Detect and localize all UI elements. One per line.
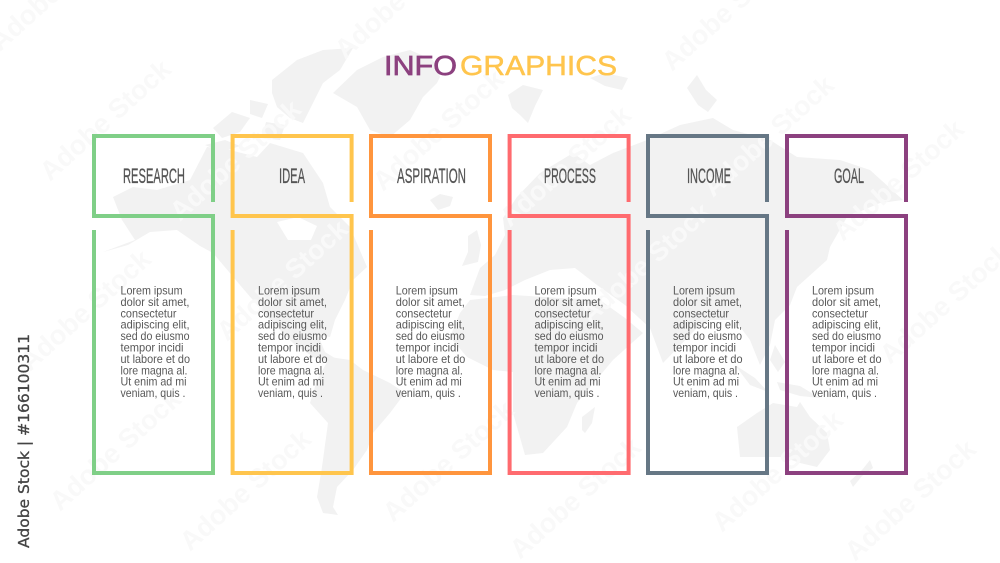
panel: income xyxy=(648,136,767,473)
panel: income: consectetur xyxy=(673,306,729,320)
panel: process: veniam, quis . xyxy=(534,386,600,400)
panel: process xyxy=(510,136,629,473)
panel: process: Ut enim ad mi xyxy=(534,375,600,389)
panel: income: ut labore et do xyxy=(673,352,743,366)
watermarks: Adobe Stock xyxy=(494,99,637,232)
watermarks: Adobe Stock xyxy=(574,196,717,329)
panel: income: Ut enim ad mi xyxy=(673,375,739,389)
panel: aspiration xyxy=(371,136,490,473)
panel: goal: veniam, quis . xyxy=(812,386,877,400)
panel: goal: consectetur xyxy=(812,306,868,320)
panel: idea: lore magna al. xyxy=(258,363,325,377)
panel: aspiration: sed do eiusmo xyxy=(396,329,465,343)
panel: research: ut labore et do xyxy=(120,352,190,366)
watermarks: Adobe Stock xyxy=(367,63,510,196)
panel: process: sed do eiusmo xyxy=(534,329,604,343)
panel: research: consectetur xyxy=(120,306,176,320)
panel: income: lore magna al. xyxy=(673,363,740,377)
panel: process: dolor sit amet, xyxy=(534,295,604,309)
watermarks: Adobe Stock xyxy=(504,431,647,563)
panel: idea xyxy=(233,136,352,473)
panel: goal: adipiscing elit, xyxy=(812,318,881,332)
watermarks: Adobe Stock xyxy=(706,404,849,537)
panel: idea: ut labore et do xyxy=(258,352,328,366)
watermarks: Adobe Stock xyxy=(697,69,840,202)
panel: aspiration: veniam, quis . xyxy=(396,386,461,400)
watermarks: Adobe Stock xyxy=(839,433,982,563)
panel: aspiration: adipiscing elit, xyxy=(396,318,465,332)
panel: goal: Lorem ipsum xyxy=(812,284,874,298)
panel: idea: sed do eiusmo xyxy=(258,329,327,343)
panel: research: Lorem ipsum xyxy=(120,284,183,298)
panel: idea: tempor incidi xyxy=(258,340,321,354)
panel: aspiration: tempor incidi xyxy=(396,340,459,354)
panel: income: veniam, quis . xyxy=(673,386,738,400)
panel: process: Lorem ipsum xyxy=(534,284,597,298)
panel: aspiration: lore magna al. xyxy=(396,363,463,377)
panel: idea: veniam, quis . xyxy=(258,386,323,400)
panel: idea: IDEA xyxy=(279,165,305,188)
watermarks: Adobe Stock xyxy=(14,243,157,376)
title: INFO xyxy=(384,50,457,81)
panel: goal: dolor sit amet, xyxy=(812,295,881,309)
panel: research: RESEARCH xyxy=(123,165,185,188)
panel: aspiration: ASPIRATION xyxy=(397,165,466,188)
panel: income: tempor incidi xyxy=(673,340,736,354)
panel: research: sed do eiusmo xyxy=(120,329,190,343)
panel: aspiration: ut labore et do xyxy=(396,352,466,366)
panel: aspiration: Lorem ipsum xyxy=(396,284,458,298)
panel: idea: adipiscing elit, xyxy=(258,318,327,332)
watermarks: Adobe Stock xyxy=(34,53,177,186)
panel: process: adipiscing elit, xyxy=(534,318,604,332)
panel: goal: sed do eiusmo xyxy=(812,329,881,343)
stock id label: Adobe Stock | #166100311 xyxy=(15,334,33,548)
panel: goal: lore magna al. xyxy=(812,363,879,377)
panel: research: dolor sit amet, xyxy=(120,295,190,309)
watermarks: Adobe Stock xyxy=(377,394,520,527)
panel: idea: dolor sit amet, xyxy=(258,295,327,309)
watermarks: Adobe Stock xyxy=(827,113,970,246)
panel: income: adipiscing elit, xyxy=(673,318,742,332)
panel: research: Ut enim ad mi xyxy=(120,375,186,389)
panel: aspiration: dolor sit amet, xyxy=(396,295,465,309)
panel: process: PROCESS xyxy=(544,165,596,188)
panel: research: adipiscing elit, xyxy=(120,318,190,332)
panel: idea: Lorem ipsum xyxy=(258,284,320,298)
panel: aspiration: consectetur xyxy=(396,306,452,320)
panel: research: lore magna al. xyxy=(120,363,188,377)
panel: aspiration: Ut enim ad mi xyxy=(396,375,462,389)
panel: process: tempor incidi xyxy=(534,340,598,354)
panel: research xyxy=(94,136,213,473)
panel: goal: GOAL xyxy=(834,165,864,188)
watermarks: Adobe Stock xyxy=(164,93,307,226)
panel: process: ut labore et do xyxy=(534,352,604,366)
panel: goal xyxy=(787,136,906,473)
panel: income: Lorem ipsum xyxy=(673,284,735,298)
panel: idea: consectetur xyxy=(258,306,314,320)
watermarks: Adobe Stock xyxy=(44,383,187,516)
watermarks: Adobe Stock xyxy=(174,423,317,556)
panel: income: INCOME xyxy=(687,165,731,188)
panel: idea: Ut enim ad mi xyxy=(258,375,324,389)
watermarks: Adobe Stock xyxy=(211,213,354,346)
title xyxy=(384,50,617,81)
background world map xyxy=(103,48,903,515)
panel: research: tempor incidi xyxy=(120,340,184,354)
title: GRAPHICS xyxy=(460,50,617,81)
panel: process: lore magna al. xyxy=(534,363,602,377)
panel: goal: Ut enim ad mi xyxy=(812,375,878,389)
panel: goal: tempor incidi xyxy=(812,340,875,354)
panel: income: sed do eiusmo xyxy=(673,329,742,343)
panel: process: consectetur xyxy=(534,306,590,320)
panel: research: veniam, quis . xyxy=(120,386,186,400)
panel: goal: ut labore et do xyxy=(812,352,882,366)
panel: income: dolor sit amet, xyxy=(673,295,742,309)
